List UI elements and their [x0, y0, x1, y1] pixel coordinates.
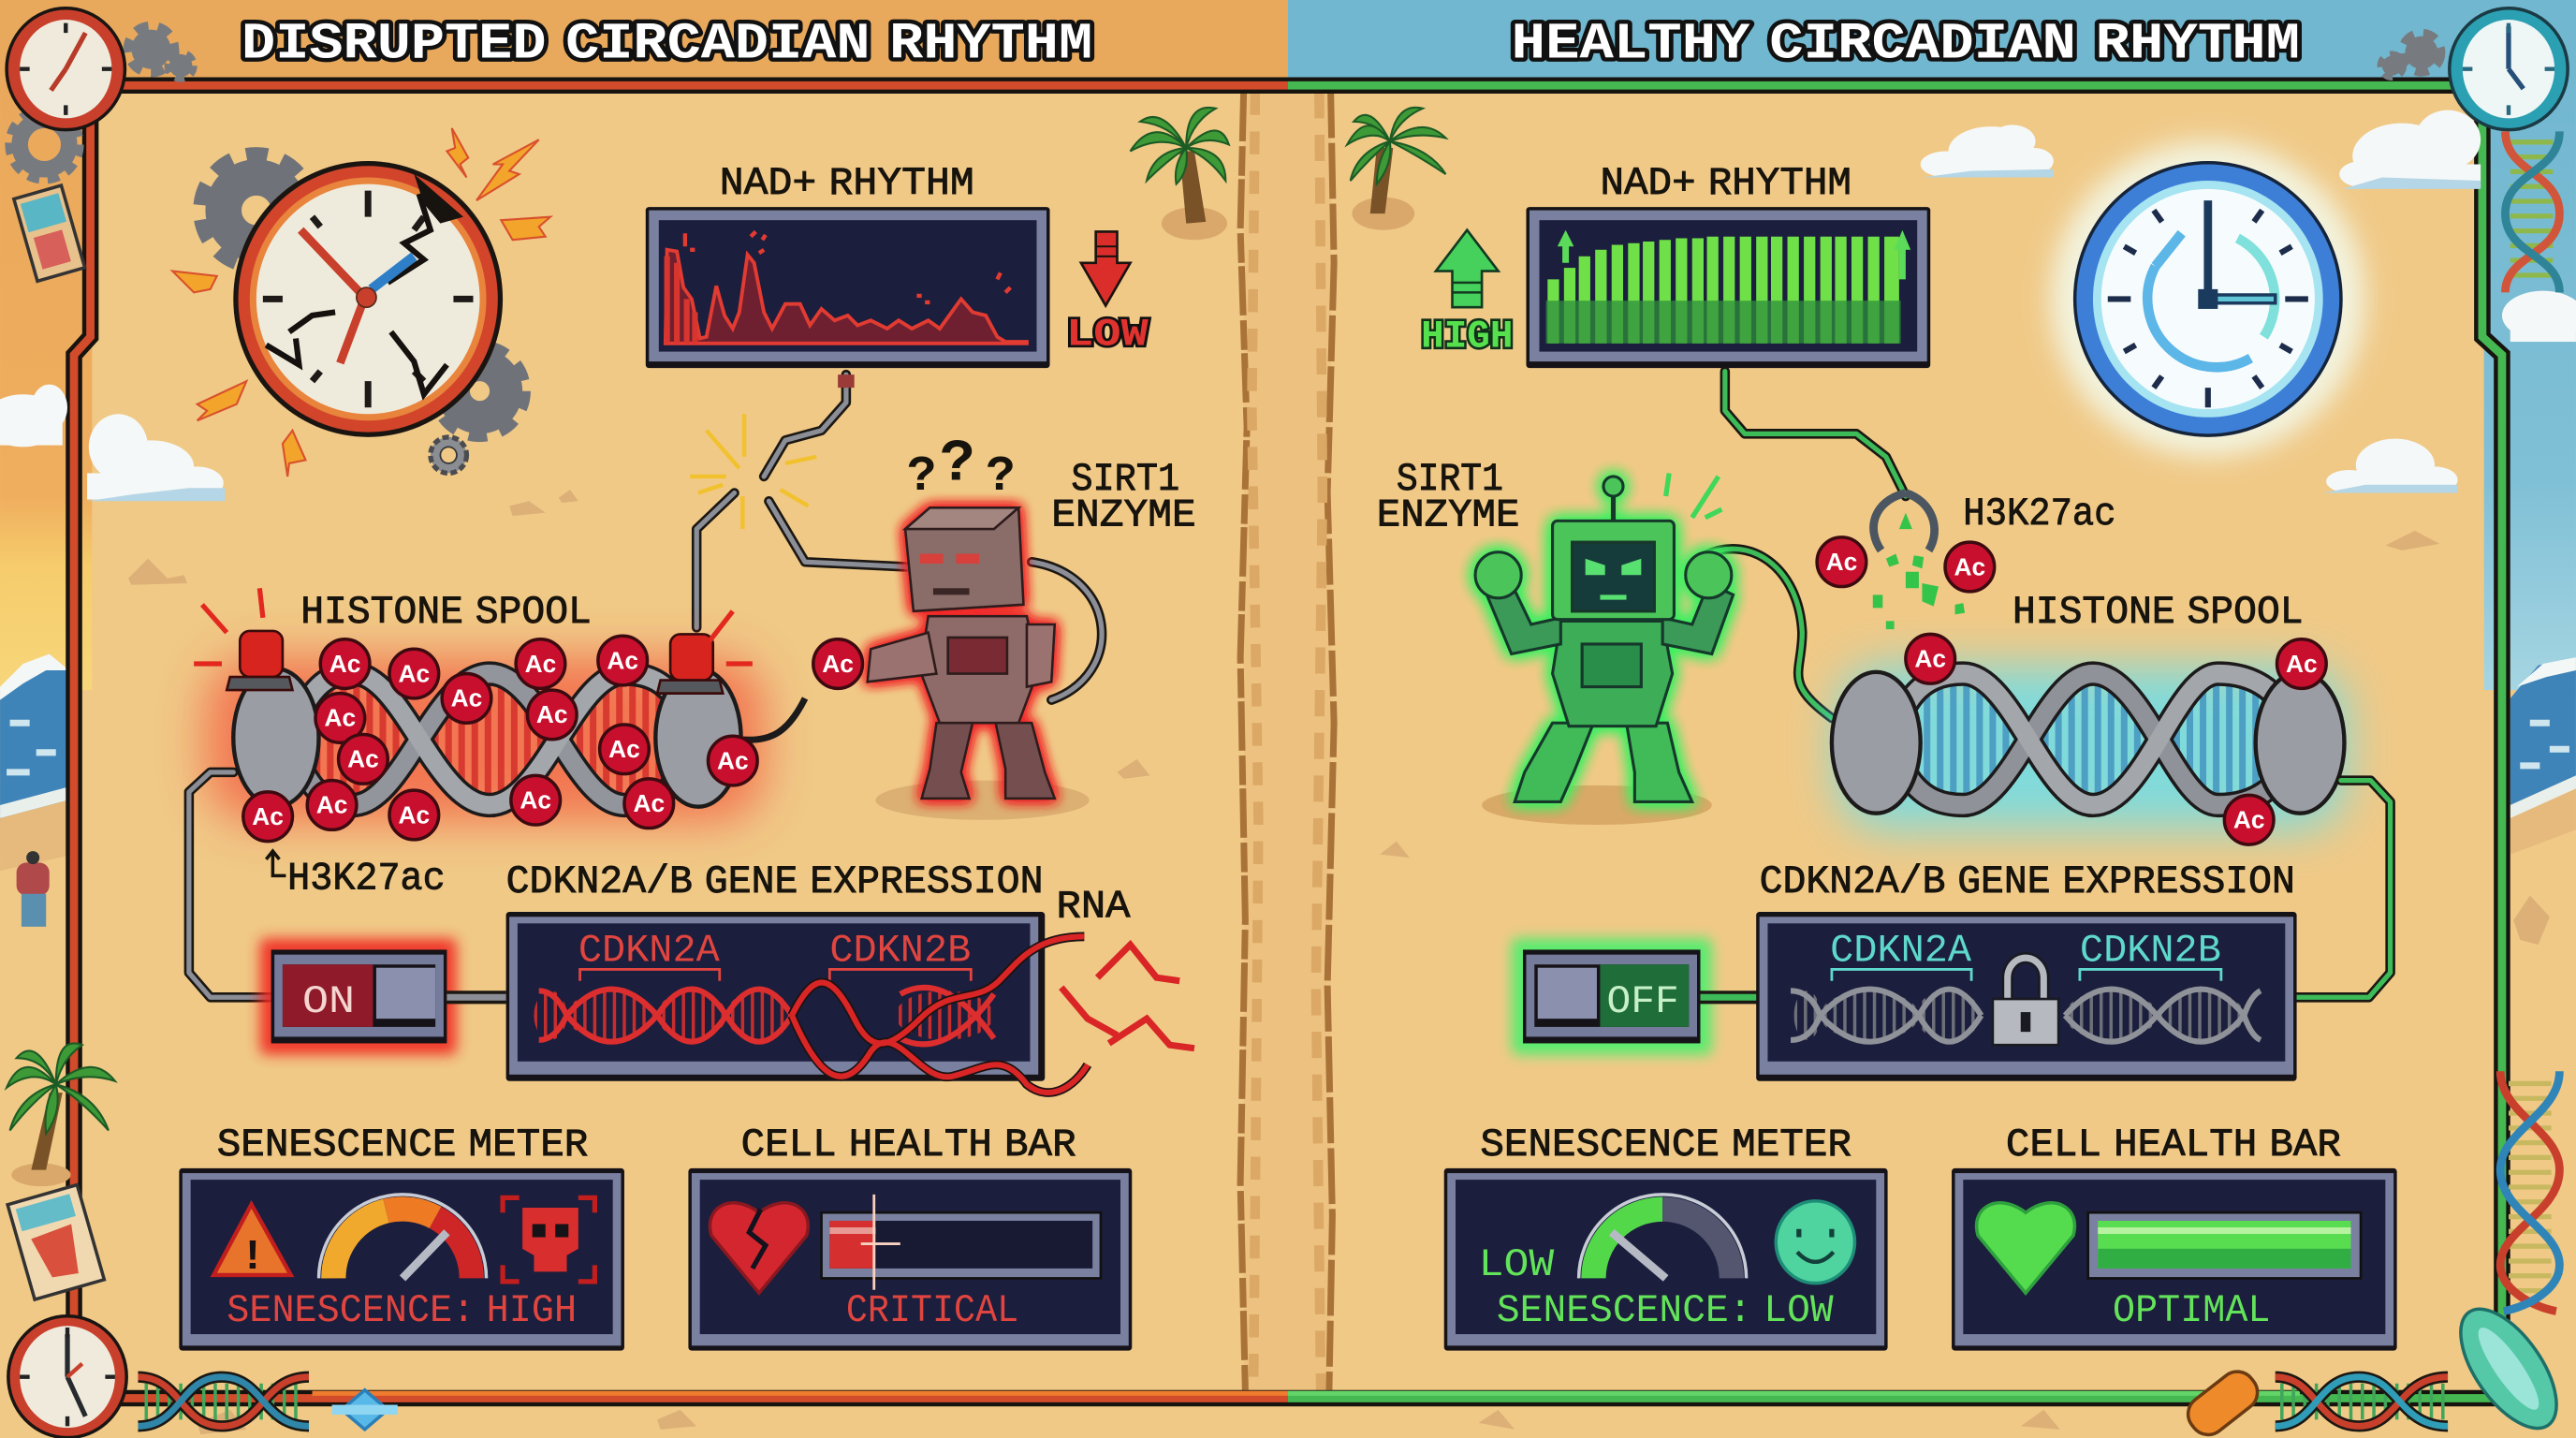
acetyl marks on histone: Ac: [316, 791, 347, 819]
wire: NAD to claw: [1725, 372, 1906, 496]
low chart bars: [667, 257, 695, 344]
green fragments: [1873, 513, 1965, 629]
remaining acetyl marks: [1906, 634, 2326, 844]
clock ticks: [2108, 211, 2308, 407]
panel: CDKN2A/B active: [506, 912, 1045, 1081]
spool red glow: [205, 657, 764, 822]
label: histone spool right: HISTONE SPOOL: [2012, 590, 2304, 635]
chest screen: [1582, 644, 1641, 687]
label: cell health right: CELL HEALTH BAR: [2006, 1123, 2341, 1167]
acetyl marks on histone: Ac: [607, 646, 638, 674]
clock healthy section: [2050, 141, 2365, 457]
robot torso: [920, 616, 1038, 723]
label LOW: LOW: [1479, 1242, 1555, 1287]
critical bar: [822, 1195, 1101, 1290]
spool strands: [304, 674, 681, 805]
freed Ac left: Ac: [1826, 548, 1857, 576]
acetyl marks on histone: [243, 636, 757, 842]
skull: [503, 1197, 594, 1282]
palm tree left panel: [1131, 108, 1229, 240]
robot eyes and smile: [1586, 559, 1641, 600]
wire: severed cable to histone: [696, 493, 735, 627]
left edge map poster bottom: [7, 1185, 104, 1299]
energy marks: [1666, 473, 1721, 518]
robot wire to histone: [1705, 549, 1832, 718]
right DNA top: [2505, 131, 2559, 292]
robot head: [1553, 521, 1674, 620]
panel: NAD+ high chart: [1526, 207, 1930, 368]
wire: switch to gene panel right: [1701, 993, 1758, 1001]
spool strands: [1906, 674, 2284, 805]
label: H3K27ac left: H3K27ac: [287, 856, 446, 901]
gene label A: CDKN2A: [1830, 929, 1972, 974]
acetyl marks on histone: Ac: [252, 802, 284, 830]
panel border: disrupted side: [74, 85, 1288, 1399]
acetyl marks on histone: Ac: [399, 659, 430, 687]
label: NAD+ rhythm left: NAD+ RHYTHM: [720, 161, 974, 206]
robot chest screen: [948, 638, 1007, 674]
readout critical: CRITICAL: [846, 1288, 1018, 1333]
panel: senescence low: [1444, 1168, 1888, 1351]
corner: bottom right DNA: [2276, 1377, 2448, 1426]
readout optimal: OPTIMAL: [2113, 1288, 2271, 1333]
panel: CDKN2A/B locked: [1756, 912, 2297, 1081]
trend arrows: [1558, 230, 1910, 279]
warning triangle: !: [240, 1233, 266, 1282]
gene bracket B: [829, 969, 971, 981]
label: cell health left: CELL HEALTH BAR: [741, 1123, 1076, 1167]
wire: histone to ON switch: [189, 772, 276, 997]
robot legs: [1515, 723, 1692, 801]
label: SIRT1 enzyme right: ENZYME: [1377, 493, 1519, 538]
label: gene expression left: CDKN2A/B GENE EXPRESSION: [506, 859, 1044, 904]
readout low: SENESCENCE: LOW: [1497, 1288, 1834, 1333]
acetyl marks on histone: Ac: [451, 684, 482, 712]
antenna tip: [1603, 477, 1623, 496]
gene rungs: [1794, 1002, 2257, 1030]
label: RNA: RNA: [1057, 884, 1131, 929]
freed Ac right: [1945, 542, 1995, 592]
spool rungs: [1897, 707, 2284, 772]
gene label B: CDKN2B: [2080, 929, 2221, 974]
palm tree lower left: [7, 1043, 115, 1186]
antenna: [1612, 493, 1615, 522]
robot head: [905, 507, 1023, 611]
acetyl marks on histone: Ac: [633, 789, 665, 817]
robot arms: [1486, 583, 1734, 654]
high chart bars: [1547, 237, 1899, 344]
small gear: [431, 437, 466, 473]
robot question marks: ?: [907, 448, 936, 505]
arrow: high up: [1436, 230, 1499, 307]
robot wire back: [1032, 562, 1102, 700]
robot torso: [1553, 621, 1673, 726]
spool end caps: [233, 668, 741, 807]
robot legs: [922, 723, 1055, 799]
arrow: low down: [1081, 231, 1131, 305]
clock aura: [2050, 141, 2365, 457]
corner: top right clock and gears: [2382, 8, 2568, 130]
label: SIRT1 enzyme left: ENZYME: [1051, 493, 1196, 538]
spool blue glow: [1837, 666, 2346, 829]
cycle arrows: [2147, 233, 2275, 367]
switch: OFF: OFF: [1606, 979, 1679, 1024]
switch: OFF: [1512, 938, 1712, 1055]
right ocean and waves: [2510, 657, 2576, 855]
beacon rays: [194, 588, 753, 664]
low chart noise: [685, 231, 1010, 302]
left header band: [0, 0, 1288, 79]
gene bracket A: [580, 969, 720, 981]
clock hands: [300, 230, 414, 363]
readout high: SENESCENCE: HIGH: [227, 1288, 577, 1333]
wire: severed cable to robot: [768, 501, 907, 566]
left edge map poster top: [14, 185, 85, 281]
robot arms: [868, 624, 1055, 687]
panel: senescence high: [179, 1168, 624, 1351]
corner: bottom left DNA: [138, 1377, 309, 1426]
switch: ON: ON: [302, 979, 355, 1024]
clock body: [233, 161, 503, 437]
Ac held by robot: [813, 639, 862, 688]
acetyl marks on histone: Ac: [608, 735, 640, 763]
gene bracket B: [2080, 969, 2221, 981]
spool end caps: [1832, 672, 2344, 814]
clock cracks: [266, 194, 446, 394]
gene rungs: [534, 1002, 1005, 1030]
acetyl marks on histone: Ac: [329, 650, 360, 678]
shadow under robot right: [1482, 785, 1712, 825]
wire: switch to gene panel left: [446, 993, 506, 1001]
gene label A: CDKN2A: [578, 929, 720, 974]
gears behind clock: [200, 154, 524, 435]
Ac held by robot: Ac: [822, 650, 854, 678]
label: NAD+ rhythm right: NAD+ RHYTHM: [1600, 161, 1852, 206]
histone spool left: [194, 588, 805, 822]
shadow under robot left: [875, 781, 1090, 820]
robot question marks: ?: [940, 430, 975, 497]
wire: severed NAD cable upper: [764, 374, 855, 477]
left edge figure: [17, 851, 50, 927]
warning triangle: [213, 1204, 291, 1282]
smiley: [1776, 1201, 1854, 1284]
padlock: [1993, 958, 2058, 1045]
switch: ON: [259, 938, 457, 1055]
right header band: [1288, 0, 2576, 79]
acetyl marks on histone: Ac: [347, 745, 379, 773]
acetyl marks on histone: Ac: [399, 800, 430, 829]
broken clock section: [172, 128, 550, 477]
right sky strip: [2484, 0, 2576, 690]
sparks: [172, 128, 550, 477]
acetyl marks on histone: Ac: [325, 704, 356, 732]
robot eyes and mouth: [920, 553, 979, 564]
wire stub: [739, 698, 805, 740]
gene bracket A: [1832, 969, 1971, 981]
left ocean and waves: [0, 654, 74, 871]
panel: NAD+ low chart: [646, 207, 1050, 368]
icon: blue crystal: [332, 1390, 398, 1430]
sparks at cable break: [690, 414, 816, 529]
acetyl marks on histone: Ac: [520, 785, 551, 814]
acetyl marks on histone: Ac: [536, 700, 568, 728]
claw removing acetyl: [1874, 493, 1935, 550]
label: senescence meter left: SENESCENCE METER: [217, 1123, 588, 1167]
icon: orange pill: [2181, 1364, 2264, 1438]
robot question marks: ?: [986, 448, 1016, 505]
label: senescence meter right: SENESCENCE METER: [1480, 1123, 1852, 1167]
green heart: [1977, 1203, 2074, 1293]
optimal bar: [2088, 1212, 2361, 1278]
clouds left: [0, 385, 225, 501]
freed Ac right: Ac: [1954, 552, 1985, 580]
crack notch: [414, 174, 463, 224]
remaining acetyl marks: Ac: [1914, 645, 1946, 673]
label: high: HIGH: [1421, 314, 1513, 359]
arrow: to H3K27ac: [266, 851, 285, 875]
wire: histone to gene panel right: [2297, 781, 2391, 997]
robot face: [1573, 542, 1654, 611]
label: histone spool left: HISTONE SPOOL: [300, 590, 592, 635]
gauge low: [1579, 1195, 1747, 1278]
header: healthy title: HEALTHY CIRCADIAN RHYTHM: [1512, 16, 2300, 73]
header: disrupted title: DISRUPTED CIRCADIAN RHYTHM: [242, 16, 1092, 73]
robot question marks: [907, 430, 1016, 505]
high chart lower band: [1546, 301, 1901, 344]
broken heart: [710, 1203, 808, 1293]
left sky strip: [0, 0, 92, 690]
histone spool right: [1832, 634, 2346, 844]
freed Ac left: [1817, 537, 1866, 587]
panel border: healthy side: [1288, 85, 2502, 1399]
spool rungs: [287, 707, 690, 772]
low chart area: [666, 250, 1027, 344]
RNA strands spilling out: [792, 936, 1194, 1093]
gene label B: CDKN2B: [829, 929, 971, 974]
warning beacons: [227, 631, 723, 694]
label: H3K27ac right: H3K27ac: [1963, 492, 2116, 536]
right DNA bottom: [2500, 1071, 2559, 1312]
sand specks: [128, 490, 2550, 1434]
remaining acetyl marks: Ac: [2286, 650, 2318, 678]
central sand path: [1240, 92, 1334, 1390]
corner: bottom left clock: [8, 1316, 126, 1438]
gene DNA strands: [539, 988, 994, 1044]
label: SIRT1 enzyme left: [1051, 457, 1196, 538]
label: gene expression right: CDKN2A/B GENE EXPRESSION: [1760, 859, 2295, 904]
icon: teal capsule: [2442, 1293, 2575, 1438]
label: SIRT1 enzyme left: SIRT1: [1071, 457, 1179, 502]
panel: cell health optimal: [1952, 1168, 2397, 1351]
gene DNA strands: [1791, 990, 2261, 1042]
corner: top left clock and gears: [7, 8, 192, 179]
clock hands: [2198, 200, 2277, 309]
clock ticks: [263, 191, 474, 407]
acetyl marks on histone: Ac: [525, 650, 556, 678]
palm tree right panel: [1347, 108, 1445, 230]
label: low: LOW: [1066, 313, 1149, 358]
robot: healthy SIRT1: [1475, 477, 1734, 801]
clock ring: [2073, 161, 2343, 437]
acetyl marks on histone: Ac: [717, 746, 749, 774]
label: SIRT1 enzyme right: SIRT1: [1397, 457, 1503, 502]
panel: cell health critical: [688, 1168, 1132, 1351]
remaining acetyl marks: Ac: [2233, 806, 2265, 834]
clouds right panel: [1921, 110, 2576, 493]
fists: [1475, 552, 1732, 598]
gauge high: [319, 1195, 487, 1278]
robot: malfunctioning SIRT1: [868, 507, 1055, 799]
label: SIRT1 enzyme right: [1377, 457, 1519, 538]
